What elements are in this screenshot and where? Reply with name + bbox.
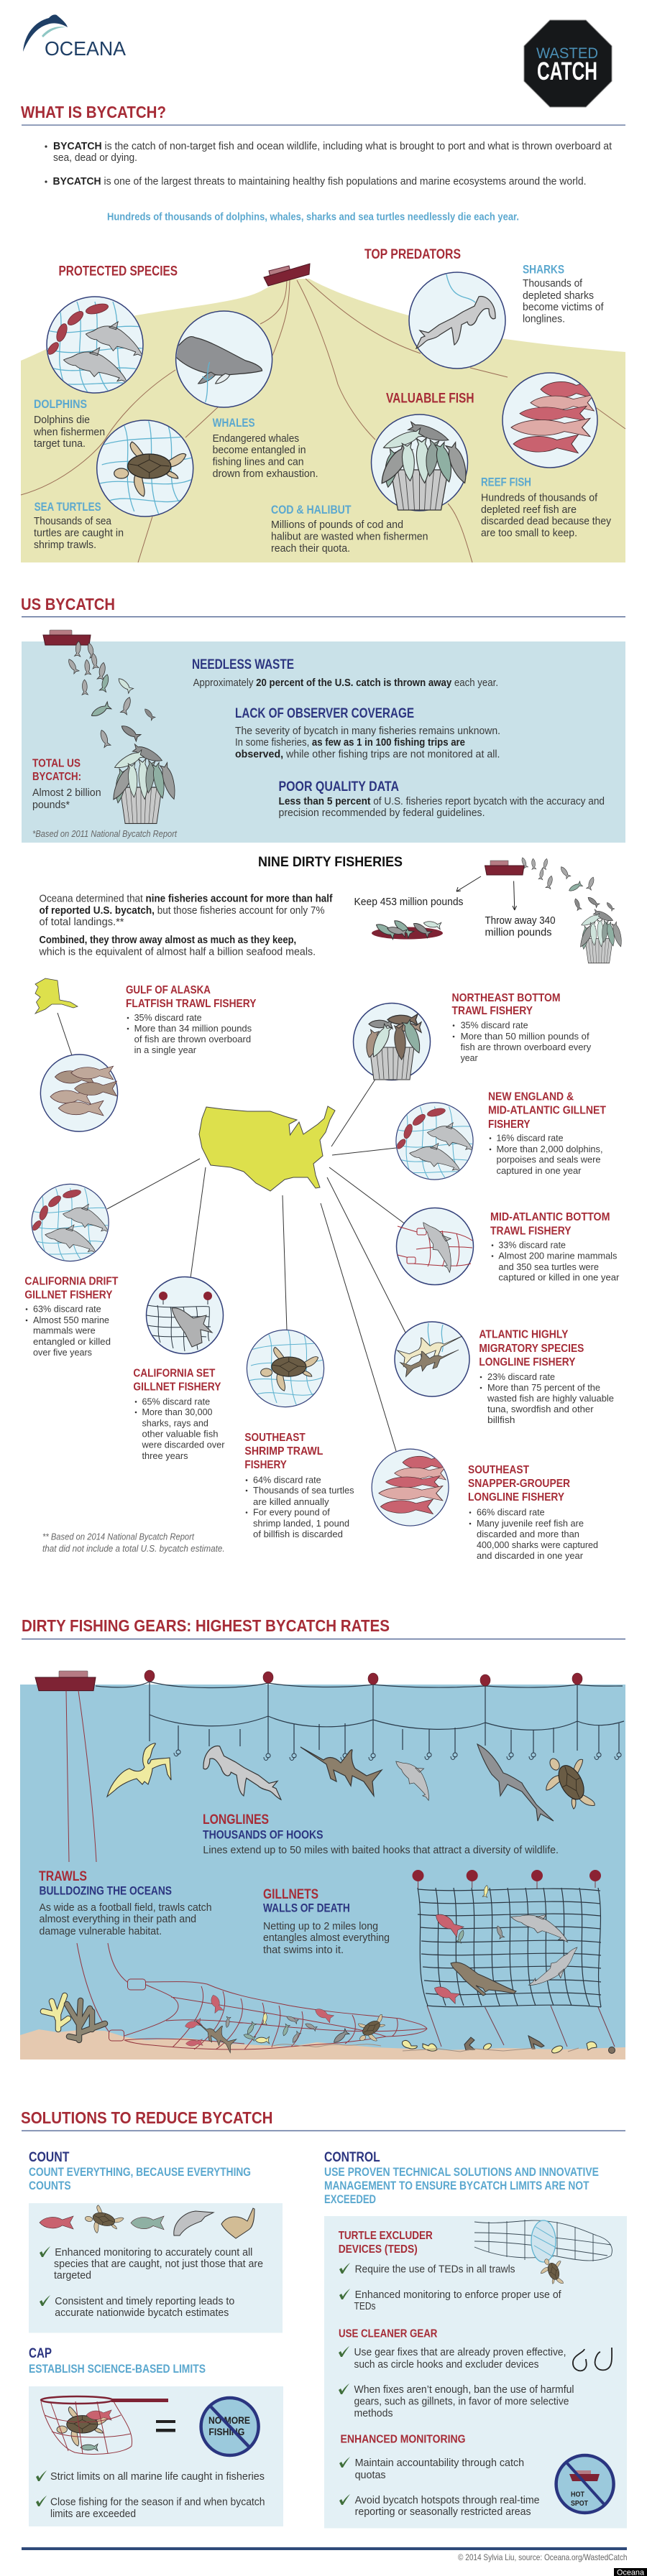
text block: whales: Endangered whales (213, 433, 299, 445)
text block: longlines: THOUSANDS OF HOOKS (203, 1828, 324, 1842)
text block: needless waste (192, 657, 498, 689)
heading: what is bycatch: WHAT IS BYCATCH? (21, 103, 166, 121)
text block: reef fish: REEF FISH (481, 476, 531, 489)
total US bycatch stat: TOTAL US (32, 757, 81, 770)
text block: use cleaner gear: such as circle hooks and excluder devices (354, 2359, 539, 2371)
fishery: Atlantic highly migratory species (395, 1322, 614, 1425)
fishery: California set gillnet: sharks, rays and (142, 1418, 208, 1429)
text block: use cleaner gear (339, 2327, 574, 2419)
text block: longlines: Lines extend up to 50 miles with baited hooks that attract a diversity of wildlife. (203, 1845, 559, 1856)
text block: enhanced monitoring: Avoid bycatch hotspots through real-time (355, 2495, 540, 2506)
text block: sharks (523, 264, 604, 325)
fishery: Southeast snapper-grouper (372, 1449, 598, 1561)
text block: gillnets: GILLNETS (263, 1887, 318, 1902)
fishery: Northeast bottom trawl: More than 50 million pounds of (461, 1031, 589, 1042)
fishery: California set gillnet: were discarded over (142, 1440, 225, 1450)
icon: swordfish on hook (300, 1747, 382, 1796)
text block: use cleaner gear: methods (354, 2408, 393, 2419)
icon: hammerhead shark (409, 272, 505, 369)
fishery: Northeast bottom trawl (354, 992, 592, 1080)
diagram: trawl net (43, 1691, 427, 2053)
map: Alaska (35, 978, 78, 1014)
text block: gillnets: Netting up to 2 miles long (263, 1921, 378, 1932)
icon: dolphins in net (395, 1103, 473, 1180)
text block: whales (213, 417, 318, 480)
text block: nine fisheries intro (39, 894, 333, 958)
diagram: longline (96, 1670, 624, 1760)
fishery: Gulf of Alaska: 35% discard rate (134, 1012, 202, 1023)
text block: reef fish: are too small to keep. (481, 527, 577, 539)
heading: count: COUNT (29, 2150, 70, 2165)
fishery: Southeast shrimp trawl: of billfish is discarded (253, 1529, 343, 1539)
bullet: enhanced monitoring (40, 2246, 263, 2281)
text block: dolphins: DOLPHINS (34, 398, 87, 411)
label: throw away: Throw away 340 (485, 915, 555, 927)
label: protected species: PROTECTED SPECIES (59, 264, 178, 279)
text block: TEDs: DEVICES (TEDS) (339, 2243, 418, 2256)
total US bycatch stat: Almost 2 billion (32, 787, 101, 799)
bullet: enhanced monitoring: targeted (54, 2270, 91, 2281)
text block: cod and halibut: COD & HALIBUT (271, 504, 351, 516)
icon: reef fish (503, 373, 597, 468)
text block: reef fish: Hundreds of thousands of (481, 493, 598, 504)
text block: sea turtles: SEA TURTLES (35, 501, 101, 514)
fishery: Atlantic highly migratory species: billfish (487, 1414, 515, 1425)
label: throw away (485, 915, 555, 939)
total US bycatch stat (32, 757, 101, 811)
text block: trawls (39, 1869, 211, 1937)
text block: gillnets (263, 1887, 390, 1956)
text block: TEDs (339, 2230, 562, 2312)
panel: net of species (21, 247, 625, 562)
fishery: Mid-Atlantic bottom trawl: Almost 200 marine mammals (498, 1250, 618, 1261)
icon: fishing boat (264, 264, 310, 286)
heading: control: CONTROL (324, 2150, 380, 2165)
text block: needless waste: Approximately 20 percent of the U.S. catch is thrown away each year. (193, 677, 498, 689)
fishery: Southeast shrimp trawl: SHRIMP TRAWL (244, 1445, 324, 1458)
fishery: New England gillnet: porpoises and seals were (496, 1154, 601, 1165)
icon: turtle excluder device (474, 2220, 612, 2289)
fishery: Mid-Atlantic bottom trawl (397, 1208, 620, 1284)
text block: cod and halibut (271, 504, 428, 555)
icon: hammerhead on hook (203, 1746, 281, 1799)
fishery: Atlantic highly migratory species: MIGRATORY SPECIES (479, 1343, 584, 1355)
icon: shark on hook (477, 1744, 554, 1821)
text block: nine fisheries intro: of total landings.** (39, 917, 124, 928)
text block: nine fisheries intro: Oceana determined that nine fisheries account for more than half (39, 894, 333, 905)
icon: no more fishing sign: NO MORE (208, 2414, 250, 2426)
fishery: Southeast shrimp trawl: SOUTHEAST (244, 1432, 306, 1444)
fishery: Mid-Atlantic bottom trawl: TRAWL FISHERY (490, 1226, 572, 1237)
bullet: close fishing (36, 2496, 265, 2520)
text block: sea turtles: turtles are caught in (34, 527, 124, 539)
icon: whale (175, 311, 272, 407)
badge: Wasted Catch stop sign: CATCH (537, 57, 597, 85)
text block: reef fish (481, 476, 612, 539)
text block: poor quality data: precision recommended by federal guidelines. (279, 807, 485, 819)
fishery: New England gillnet: NEW ENGLAND & (488, 1090, 574, 1103)
icon: seabird (107, 1743, 171, 1797)
icon: shark in gillnet (147, 1277, 223, 1353)
equals sign (156, 2420, 175, 2432)
icon: no boats in hot spot: SPOT (571, 2500, 588, 2508)
icon: no boats in hot spot (556, 2455, 614, 2513)
arrow: keep (456, 876, 481, 891)
bullet: consistent reporting: Consistent and timely reporting leads to (55, 2296, 234, 2307)
icon: fishing boat (35, 1671, 96, 1691)
fishery: Gulf of Alaska: of fish are thrown overboard (134, 1034, 251, 1044)
text block: enhanced monitoring: ENHANCED MONITORING (341, 2434, 466, 2445)
text block: bycatch definition: sea, dead or dying. (53, 152, 137, 164)
bullet: strict limits: Strict limits on all marine life caught in fisheries (50, 2471, 265, 2483)
text block: dolphins (33, 398, 105, 450)
label: valuable fish: VALUABLE FISH (386, 392, 474, 407)
text block: sharks: become victims of (523, 302, 604, 313)
fishery: Southeast snapper-grouper: 66% discard rate (477, 1507, 545, 1517)
heading: nine dirty fisheries: NINE DIRTY FISHERIES (258, 855, 403, 870)
text block: enhanced monitoring: quotas (355, 2470, 386, 2481)
bullet: consistent reporting: accurate nationwide bycatch estimates (55, 2307, 229, 2319)
text block: whales: become entangled in (213, 445, 306, 456)
text block: TEDs: TEDs (354, 2301, 375, 2312)
text block: reef fish: depleted reef fish are (481, 504, 577, 516)
label: top predators: TOP PREDATORS (364, 247, 461, 262)
footnote: 2014 report: ** Based on 2014 National Bycatch Report (42, 1532, 194, 1542)
fishery: California set gillnet: CALIFORNIA SET (133, 1368, 216, 1379)
diagram: gillnet (413, 1870, 615, 2047)
fishery: Southeast snapper-grouper: discarded and more than (477, 1529, 579, 1539)
seabed (20, 2029, 625, 2060)
fishery: Southeast shrimp trawl: For every pound of (253, 1507, 330, 1517)
icon: bucket of bycatch (109, 743, 178, 823)
text block: use cleaner gear: gears, such as gillnets, in favor of more selective (354, 2396, 569, 2408)
text block: poor quality data (279, 779, 605, 819)
badge: Wasted Catch stop sign (524, 20, 612, 107)
fishery: New England gillnet (395, 1090, 606, 1180)
fishery: Southeast snapper-grouper: LONGLINE FISHERY (468, 1491, 564, 1504)
fishery: Atlantic highly migratory species: 23% discard rate (487, 1371, 555, 1382)
arrow: throw away (513, 881, 516, 910)
bullet: close fishing: limits are exceeded (50, 2508, 136, 2520)
fishery: Southeast snapper-grouper: Many juvenile reef fish are (477, 1518, 584, 1529)
fishery: Mid-Atlantic bottom trawl: and 350 sea turtles were (498, 1261, 599, 1272)
text block: trawls: TRAWLS (39, 1869, 87, 1884)
text block: needless waste: NEEDLESS WASTE (192, 657, 294, 672)
panel: cap (29, 2386, 283, 2526)
heading: solutions: SOLUTIONS TO REDUCE BYCATCH (21, 2108, 273, 2127)
logo: Oceana: OCEANA (45, 37, 126, 60)
text block: nine fisheries intro: of reported U.S. bycatch, but those fisheries account for only 7% (39, 905, 325, 917)
text block: TEDs: Enhanced monitoring to enforce proper use of (355, 2289, 562, 2301)
bullet: consistent reporting (40, 2295, 234, 2319)
heading: cap: ESTABLISH SCIENCE-BASED LIMITS (29, 2363, 206, 2376)
icon: dolphin in trawl (397, 1208, 473, 1284)
text block: trawls: almost everything in their path and (39, 1914, 196, 1925)
heading: control: EXCEEDED (324, 2193, 376, 2206)
fishery: Gulf of Alaska: FLATFISH TRAWL FISHERY (126, 998, 257, 1010)
fishery: New England gillnet: FISHERY (488, 1118, 531, 1131)
footnote: *Based on 2011 National Bycatch Report (32, 829, 177, 839)
logo: Oceana (23, 14, 126, 60)
icon: boat with falling fish (43, 630, 155, 748)
fishery: Southeast shrimp trawl (244, 1330, 354, 1539)
label: keep: Keep 453 million pounds (354, 896, 463, 908)
fishery: Atlantic highly migratory species: LONGLINE FISHERY (479, 1356, 576, 1368)
text block: use cleaner gear: When fixes aren’t enough, ban the use of harmful (354, 2384, 574, 2396)
text block: lack of observer coverage: LACK OF OBSERVER COVERAGE (235, 706, 414, 721)
icon: reef fish (372, 1449, 449, 1526)
icon: no more fishing sign: FISHING (208, 2426, 244, 2437)
heading: cap (29, 2346, 206, 2376)
text block: lack of observer coverage (235, 706, 500, 760)
text block: whales: fishing lines and can (213, 457, 304, 468)
fishery: California set gillnet: More than 30,000 (142, 1407, 213, 1417)
text block: lack of observer coverage: The severity of bycatch in many fisheries remains unknown. (235, 726, 500, 737)
fishery: Atlantic highly migratory species: wasted fish are highly valuable (487, 1393, 614, 1404)
icon: turtle on hook (535, 1746, 605, 1822)
icon: bucket of cod and halibut (371, 414, 471, 511)
fishery: New England gillnet: 16% discard rate (496, 1132, 564, 1144)
fishery: California drift gillnet: mammals were (33, 1325, 96, 1336)
text block: sharks: Thousands of (523, 278, 583, 289)
text block: whales: drown from exhaustion. (213, 468, 318, 480)
icon: sea turtle in net (97, 420, 193, 516)
fishery: Northeast bottom trawl: fish are thrown overboard every (461, 1042, 592, 1052)
text block: lack of observer coverage: observed, while other fishing trips are not monitored at all. (235, 749, 500, 760)
fishery: New England gillnet: More than 2,000 dolphins, (496, 1144, 602, 1154)
text block: dolphins: when fishermen (33, 427, 105, 438)
fishery: California set gillnet (133, 1277, 225, 1461)
fishery: Southeast snapper-grouper: 400,000 sharks were captured (477, 1539, 598, 1550)
fishery: Mid-Atlantic bottom trawl: 33% discard rate (498, 1240, 566, 1251)
text block: dolphins: Dolphins die (34, 414, 90, 426)
bullet: close fishing: Close fishing for the season if and when bycatch (50, 2497, 265, 2508)
fishery: Northeast bottom trawl: year (461, 1052, 478, 1063)
icon: small boat (485, 861, 524, 875)
label: throw away: million pounds (485, 927, 552, 939)
icon: bucket of groundfish (354, 1003, 430, 1080)
text block: use cleaner gear: Use gear fixes that are already proven effective, (354, 2347, 566, 2358)
icon: billfish and shark (395, 1322, 469, 1396)
panel: ocean with fishing gear (20, 1670, 625, 2060)
text block: gillnets: WALLS OF DEATH (263, 1901, 350, 1915)
text block: nine fisheries intro: which is the equivalent of almost half a billion seafood meals. (39, 947, 316, 958)
fishery: Gulf of Alaska: in a single year (134, 1044, 197, 1055)
heading: control: MANAGEMENT TO ENSURE BYCATCH LIMITS ARE NOT (324, 2179, 589, 2192)
fishery: California set gillnet: other valuable fish (142, 1428, 219, 1439)
text block: enhanced monitoring: Maintain accountability through catch (355, 2457, 524, 2469)
total US bycatch stat: BYCATCH: (32, 771, 81, 783)
fishery: Gulf of Alaska: More than 34 million pounds (134, 1023, 252, 1034)
text block: gillnets: that swims into it. (263, 1945, 344, 1956)
fishery: California drift gillnet: CALIFORNIA DRIFT (24, 1276, 119, 1288)
fishery: California drift gillnet (24, 1184, 119, 1358)
heading: dirty fishing gears: DIRTY FISHING GEARS: HIGHEST BYCATCH RATES (22, 1616, 390, 1635)
panel: control (324, 2216, 627, 2529)
text block: trawls: damage vulnerable habitat. (39, 1926, 162, 1937)
text block: dolphins: target tuna. (34, 438, 86, 450)
panel: count (29, 2202, 283, 2333)
fishery: Atlantic highly migratory species: tuna, swordfish and other (487, 1404, 594, 1414)
text block: cod and halibut: Millions of pounds of cod and (271, 519, 403, 531)
fishery: California drift gillnet: entangled or killed (33, 1336, 111, 1347)
heading: control (324, 2150, 599, 2206)
fishery: Southeast shrimp trawl: 64% discard rate (253, 1475, 321, 1486)
icon: thrown fish (520, 857, 615, 912)
text block: bycatch definition: BYCATCH is the catch of non-target fish and ocean wildlife, including what is brought to port and what is thrown overboard at (53, 141, 612, 152)
icon: no more fishing sign (201, 2398, 259, 2455)
icon: bucket (578, 909, 624, 963)
fishery: California drift gillnet: over five years (33, 1347, 92, 1358)
bullet: enhanced monitoring: Enhanced monitoring to accurately count all (55, 2247, 252, 2258)
total US bycatch stat: pounds* (32, 800, 70, 811)
text block: lack of observer coverage: In some fisheries, as few as 1 in 100 fishing trips are (235, 737, 465, 749)
text block: nine fisheries intro: Combined, they throw away almost as much as they keep, (39, 935, 296, 946)
icon: seal (451, 1963, 516, 1996)
icon: circle hooks (573, 2348, 612, 2371)
text block: longlines: LONGLINES (203, 1812, 269, 1827)
footnote: 2014 report (42, 1532, 225, 1554)
text block: bycatch definition (45, 141, 612, 187)
badge: Wasted Catch stop sign: WASTED (536, 45, 598, 62)
text block: sharks: SHARKS (523, 264, 564, 277)
connector lines (58, 1013, 406, 1451)
text block: sea turtles (34, 501, 124, 551)
fishery: Southeast shrimp trawl: are killed annually (253, 1496, 329, 1507)
fishery: New England gillnet: captured in one year (496, 1165, 582, 1176)
text block: enhanced monitoring: reporting or seasonally restricted areas (355, 2506, 531, 2518)
fishery: California drift gillnet: 63% discard rate (33, 1303, 101, 1315)
fishery: Southeast snapper-grouper: SNAPPER-GROUPER (468, 1478, 570, 1490)
icon: dolphins in net (31, 1184, 109, 1261)
fishery: California set gillnet: GILLNET FISHERY (133, 1381, 221, 1394)
panel: US bycatch (22, 630, 625, 843)
text block: cod and halibut: halibut are wasted when fishermen (271, 532, 428, 543)
heading: count (29, 2150, 251, 2192)
heading: control: USE PROVEN TECHNICAL SOLUTIONS AND INNOVATIVE (324, 2166, 599, 2179)
text block: bycatch definition: BYCATCH is one of the largest threats to maintaining healthy fish populations and marine ecosystems around the world. (53, 176, 587, 187)
fishery: California set gillnet: three years (142, 1450, 188, 1461)
fishery: Southeast shrimp trawl: shrimp landed, 1 pound (253, 1518, 349, 1529)
text block: whales: WHALES (213, 417, 255, 430)
callout: hundreds of thousands: Hundreds of thousands of dolphins, whales, sharks and sea turtles needlessly die each year. (107, 212, 519, 223)
text block: poor quality data: POOR QUALITY DATA (279, 779, 399, 794)
icon: dip net with catch (41, 2396, 168, 2454)
icon: turtle (247, 1330, 324, 1407)
text block: TEDs: Require the use of TEDs in all trawls (355, 2264, 515, 2275)
heading: cap: CAP (29, 2346, 52, 2361)
text block: enhanced monitoring (339, 2434, 540, 2518)
text block: sharks: depleted sharks (523, 290, 594, 302)
text block: sea turtles: shrimp trawls. (34, 539, 96, 551)
heading: count: COUNT EVERYTHING, BECAUSE EVERYTHING (29, 2166, 251, 2179)
fishery: Southeast shrimp trawl: FISHERY (244, 1459, 287, 1471)
fishery: Mid-Atlantic bottom trawl: captured or killed in one year (498, 1272, 620, 1283)
icons: species row (40, 2202, 254, 2239)
text block: trawls: BULLDOZING THE OCEANS (39, 1884, 172, 1898)
fishery: Gulf of Alaska (40, 984, 257, 1131)
fishery: Northeast bottom trawl: TRAWL FISHERY (451, 1005, 533, 1017)
text block: sea turtles: Thousands of sea (34, 516, 112, 527)
text block: sharks: longlines. (523, 313, 565, 325)
fishery: Northeast bottom trawl: NORTHEAST BOTTOM (451, 992, 561, 1004)
fishery: Southeast shrimp trawl: Thousands of sea turtles (253, 1485, 354, 1496)
icon: flatfish (40, 1055, 118, 1131)
icon: coral (43, 1996, 105, 2040)
icon: no boats in hot spot: HOT (571, 2491, 584, 2498)
icon: dolphin on hook (387, 1754, 441, 1800)
diagram: keep versus throw away (354, 857, 624, 963)
text block: use cleaner gear: USE CLEANER GEAR (339, 2327, 438, 2340)
text block: reef fish: discarded dead because they (481, 516, 612, 527)
fishery: Atlantic highly migratory species: ATLANTIC HIGHLY (479, 1329, 569, 1341)
fishery: Gulf of Alaska: GULF OF ALASKA (126, 984, 211, 996)
fishery: Southeast snapper-grouper: SOUTHEAST (468, 1464, 529, 1476)
heading: US bycatch: US BYCATCH (21, 595, 115, 613)
fishery: California drift gillnet: Almost 550 marine (33, 1315, 109, 1325)
text block: gillnets: entangles almost everything (263, 1932, 390, 1944)
fishery: California set gillnet: 65% discard rate (142, 1396, 210, 1407)
map: United States (199, 1106, 335, 1191)
heading: count: COUNTS (29, 2179, 71, 2192)
icon: seabed rocks (402, 2036, 615, 2054)
fishery: New England gillnet: MID-ATLANTIC GILLNET (488, 1105, 606, 1117)
text block: poor quality data: Less than 5 percent of U.S. fisheries report bycatch with the accuracy and (279, 796, 605, 807)
fishery: Atlantic highly migratory species: More than 75 percent of the (487, 1382, 600, 1393)
text block: longlines (203, 1812, 559, 1856)
fishery: Northeast bottom trawl: 35% discard rate (461, 1020, 528, 1031)
text block: cod and halibut: reach their quota. (271, 543, 350, 555)
fishery: California drift gillnet: GILLNET FISHERY (24, 1289, 113, 1301)
text block: TEDs: TURTLE EXCLUDER (339, 2230, 433, 2242)
text block: trawls: As wide as a football field, trawls catch (39, 1902, 211, 1914)
icon: plate of fish (372, 917, 443, 940)
footnote: 2014 report: that did not include a total U.S. bycatch estimate. (42, 1544, 225, 1554)
bullet: enhanced monitoring: species that are caught, not just those that are (54, 2258, 263, 2270)
icon: dolphins in gillnet (46, 297, 143, 393)
fishery: Mid-Atlantic bottom trawl: MID-ATLANTIC BOTTOM (490, 1211, 610, 1223)
fishery: Southeast snapper-grouper: and discarded in one year (477, 1550, 584, 1561)
